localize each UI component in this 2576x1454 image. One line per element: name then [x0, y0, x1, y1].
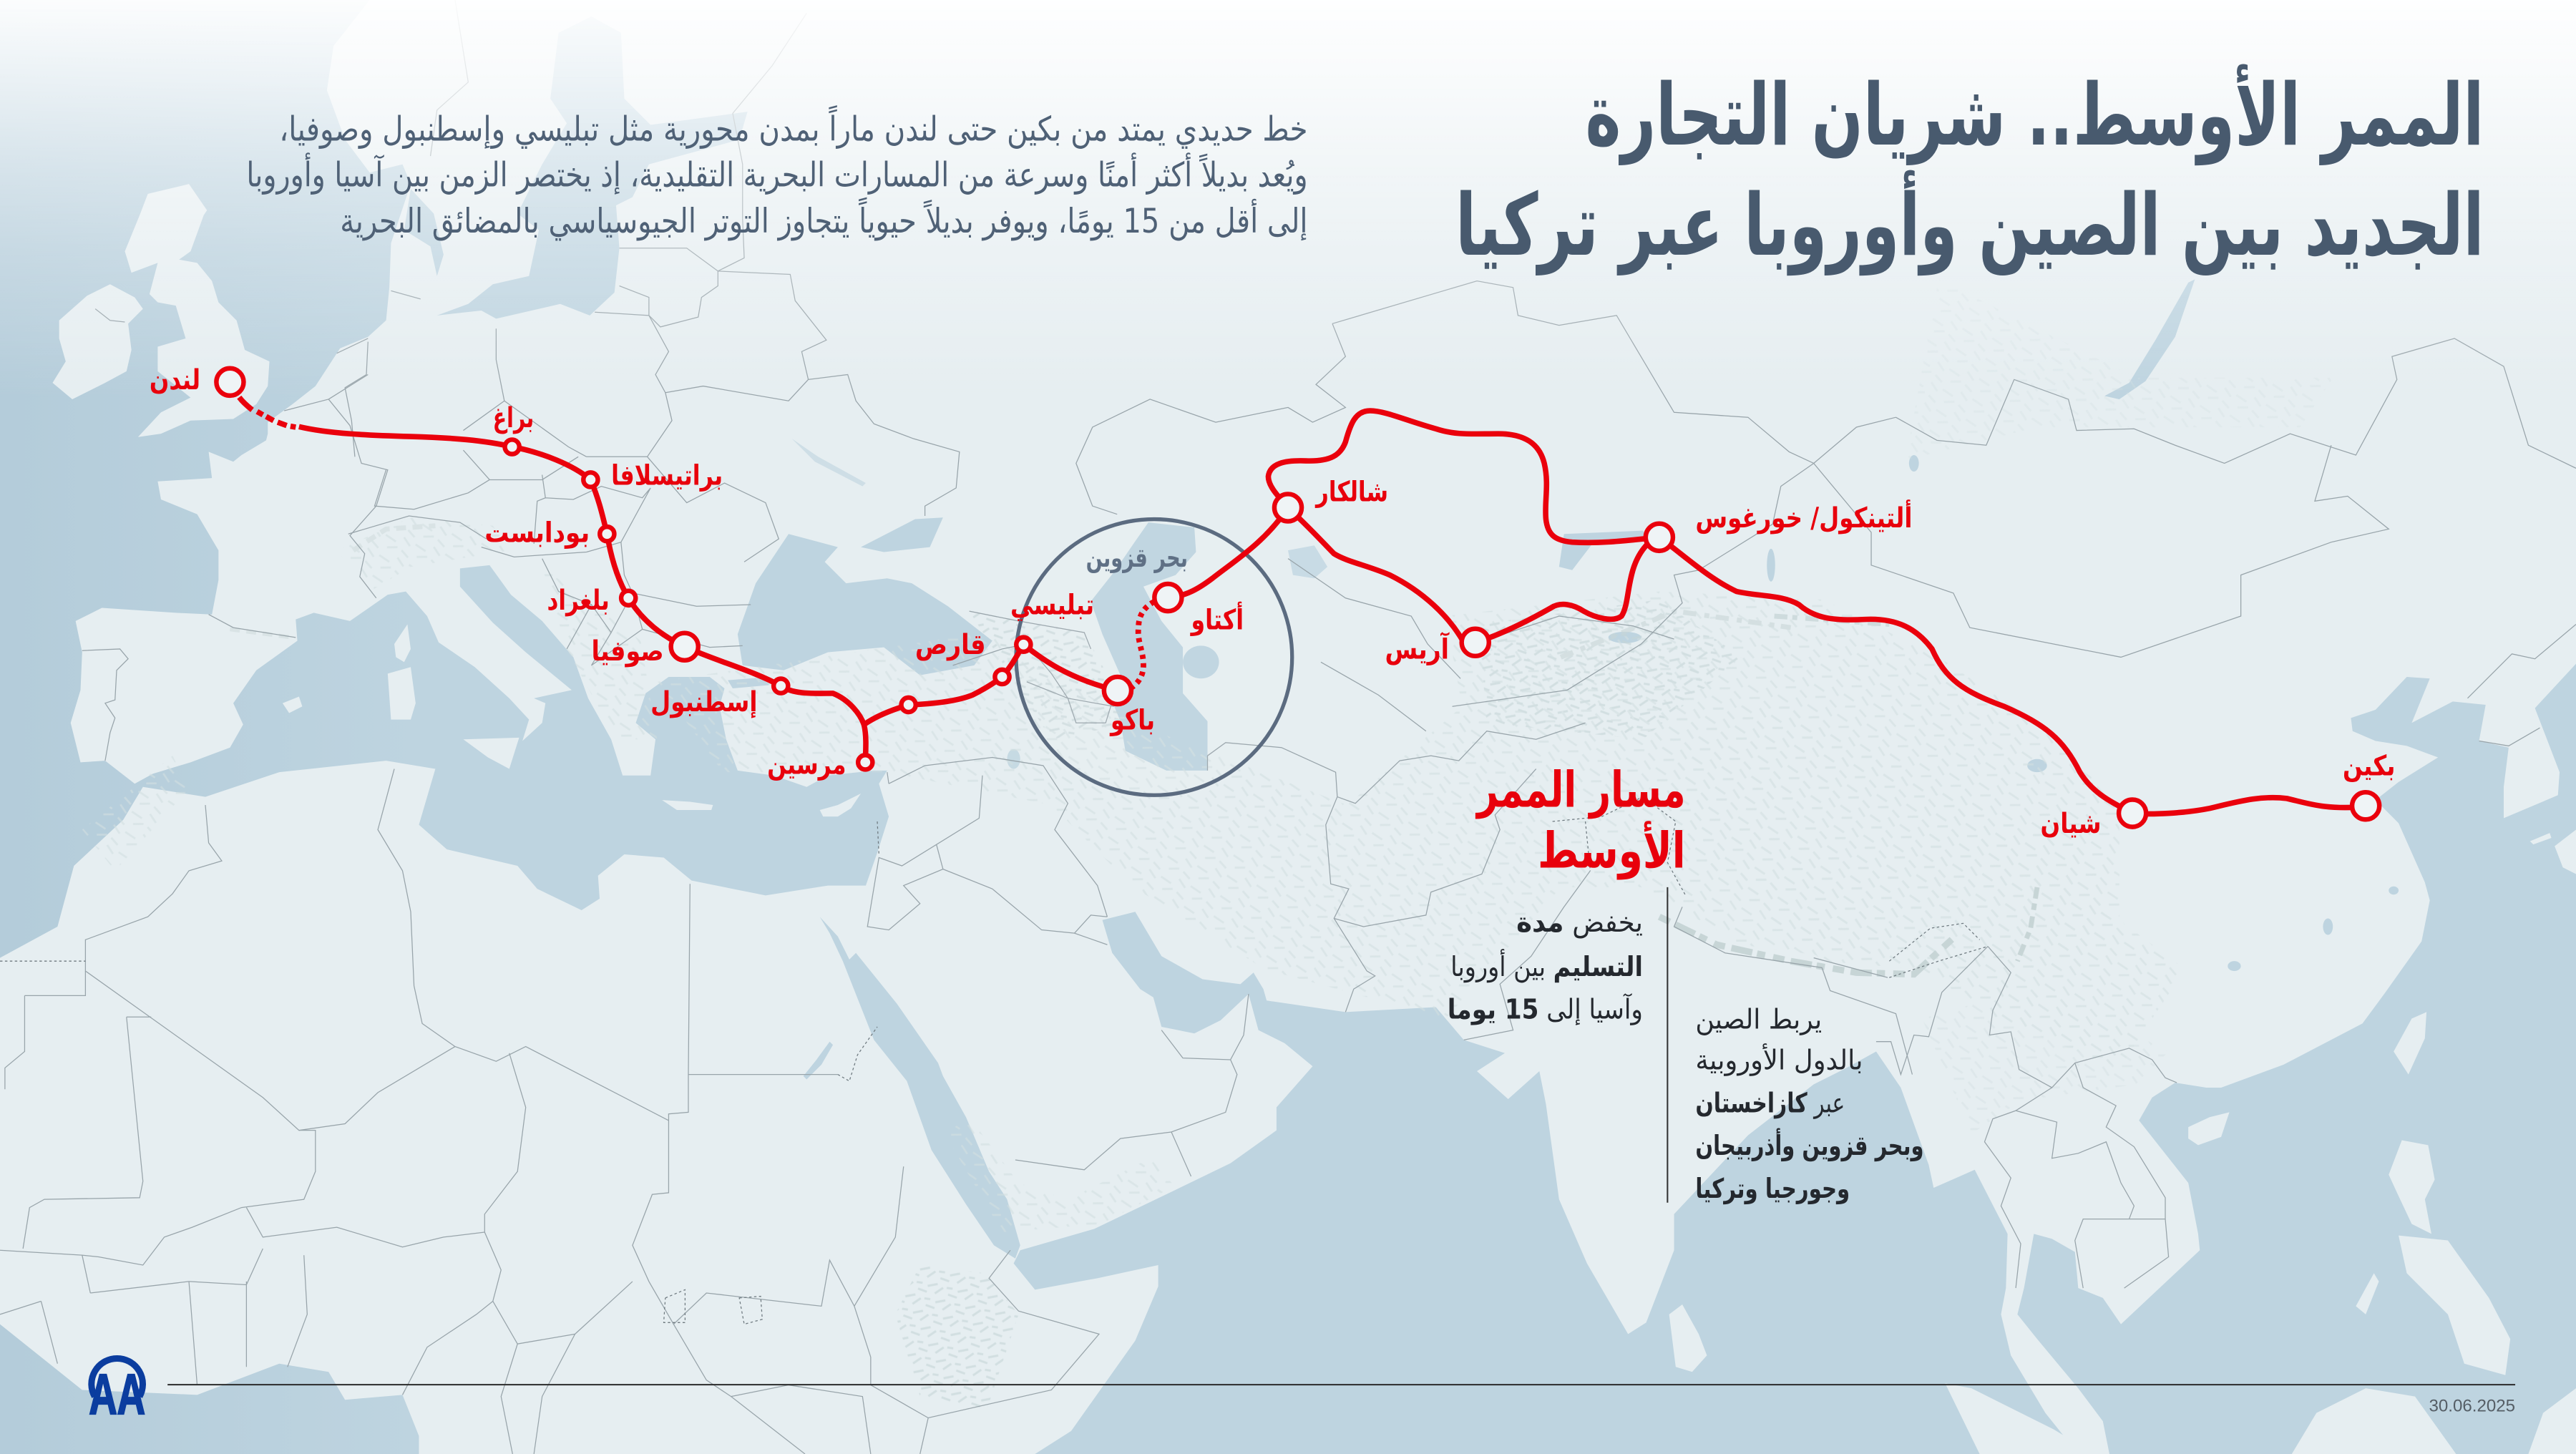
station: London: [216, 369, 243, 396]
heading: Middle Corridor route: مسار الممر: [1475, 761, 1686, 819]
label: Mersin: مرسين: [767, 748, 846, 781]
Britain: [125, 184, 270, 437]
station: Mersin: [858, 755, 872, 769]
label: Xi'an: شيان: [2041, 808, 2101, 840]
text block: delivery time: يخفض مدة: [1516, 907, 1643, 939]
label: Beijing: بكين: [2343, 751, 2395, 783]
Baltic: [437, 16, 748, 318]
Asian islands: [1669, 1304, 1707, 1372]
station: Beijing: [2352, 792, 2379, 819]
text block: countries linked: يربط الصين: [1695, 1003, 1822, 1035]
text block: delivery time: [1448, 907, 1643, 1026]
Caspian Sea: [1091, 522, 1208, 771]
text block: countries linked: وجورجيا وتركيا: [1695, 1173, 1850, 1204]
label: Budapest: بودابست: [484, 517, 590, 550]
lakes: [1559, 531, 1649, 570]
text block: delivery time: وآسيا إلى 15 يوما: [1448, 993, 1643, 1026]
text block: countries linked: عبر كازاخستان: [1695, 1087, 1845, 1119]
station: Arys: [1462, 629, 1489, 656]
station: Sofia: [671, 633, 698, 660]
text block: countries linked: بالدول الأوروبية: [1695, 1043, 1863, 1077]
London to Channel: [239, 397, 296, 427]
date: 30.06.2025: [2429, 1396, 2515, 1415]
intro paragraph: ويُعد بديلاً أكثر أمنًا وسرعة من المسارات البحرية التقليدية، إذ يختصر الزمن بين آسيا وأوروبا: [246, 153, 1308, 195]
station: Baku: [1104, 677, 1131, 704]
Mediterranean islands: [463, 738, 519, 769]
label: Kars: قارص: [915, 629, 986, 661]
text block: countries linked: [1695, 1003, 1924, 1204]
inland seas: [404, 16, 2399, 1259]
Northern loop: [1268, 411, 1659, 542]
station: Tbilisi: [1016, 638, 1030, 652]
top white fade: [0, 0, 2576, 403]
Aktau to Shalkar: [1168, 507, 1288, 597]
text block: delivery time: التسليم بين أوروبا: [1450, 949, 1643, 983]
logo: Anadolu Agency: [89, 1358, 145, 1426]
label: Baku: باكو: [1109, 704, 1155, 736]
highlight circle: Caspian Sea: [1016, 519, 1292, 795]
label: Aktau: أكتاو: [1190, 601, 1244, 636]
station: Belgrade: [621, 591, 635, 605]
heading: Middle Corridor route: [1475, 761, 1686, 879]
label: Prague: براغ: [493, 402, 534, 434]
station: Budapest: [600, 527, 614, 541]
label: Istanbul: إسطنبول: [650, 686, 757, 718]
Altynkol to Xi'an: [1659, 537, 2132, 814]
label: London: لندن: [150, 364, 200, 396]
intro paragraph: إلى أقل من 15 يومًا، ويوفر بديلاً حيوياً يتجاوز التوتر الجيوسياسي بالمضائق البحرية: [340, 197, 1308, 241]
Sofia to Mersin: [685, 647, 866, 762]
station: Xi'an: [2119, 799, 2146, 827]
railway route: [239, 397, 2366, 814]
station: Aktau: [1154, 584, 1181, 611]
label: Caspian Sea: بحر قزوين: [1086, 542, 1188, 573]
intro paragraph: [246, 105, 1308, 241]
relief shading: [82, 279, 2333, 1413]
Tbilisi to Baku: [1023, 645, 1117, 691]
station: Bratislava: [583, 472, 597, 487]
logo: Anadolu Agency: AA: [89, 1362, 145, 1426]
station: Altynkol: [1646, 524, 1673, 551]
Shalkar to Arys: [1288, 507, 1464, 643]
station: Istanbul: [774, 678, 788, 693]
label: Altynkol / Khorgos: ألتينكول/ خورغوس: [1695, 499, 1912, 535]
label: Tbilisi: تبليسي: [1010, 590, 1094, 622]
footer rule: [167, 1384, 2515, 1385]
Ireland: [52, 284, 143, 399]
label: Shalkar: شالكار: [1314, 476, 1388, 508]
station: Kars: [995, 670, 1010, 684]
text block: countries linked: وبحر قزوين وأذربيجان: [1695, 1128, 1924, 1161]
intro paragraph: خط حديدي يمتد من بكين حتى لندن ماراً بمدن محورية مثل تبليسي وإسطنبول وصوفيا،: [279, 105, 1308, 149]
station: Turkey stop: [902, 698, 916, 712]
city labels: [150, 364, 2395, 840]
Arys to Altynkol: [1475, 542, 1649, 643]
Red Sea: [820, 917, 1020, 1259]
title: [1455, 64, 2484, 275]
Sea of Marmara: [728, 677, 769, 688]
Caspian crossing: [1131, 601, 1155, 688]
label: Belgrade: بلغراد: [547, 585, 610, 617]
Channel to Sofia: [299, 426, 685, 647]
disputed borders: [0, 797, 1988, 1324]
station: Prague: [505, 439, 519, 454]
divider line: [1667, 887, 1668, 1203]
heading: Middle Corridor route: الأوسط: [1538, 821, 1686, 879]
label: Sofia: صوفيا: [592, 635, 664, 668]
Turkey to Tbilisi: [864, 645, 1023, 725]
Xi'an to Beijing: [2132, 798, 2366, 814]
route stations: [216, 369, 2379, 827]
label: Arys: آريس: [1385, 632, 1450, 666]
label: Bratislava: براتيسلافا: [611, 459, 723, 492]
station: Shalkar: [1274, 494, 1302, 522]
Sea of Azov: [861, 517, 943, 552]
Black Sea: [738, 534, 992, 675]
